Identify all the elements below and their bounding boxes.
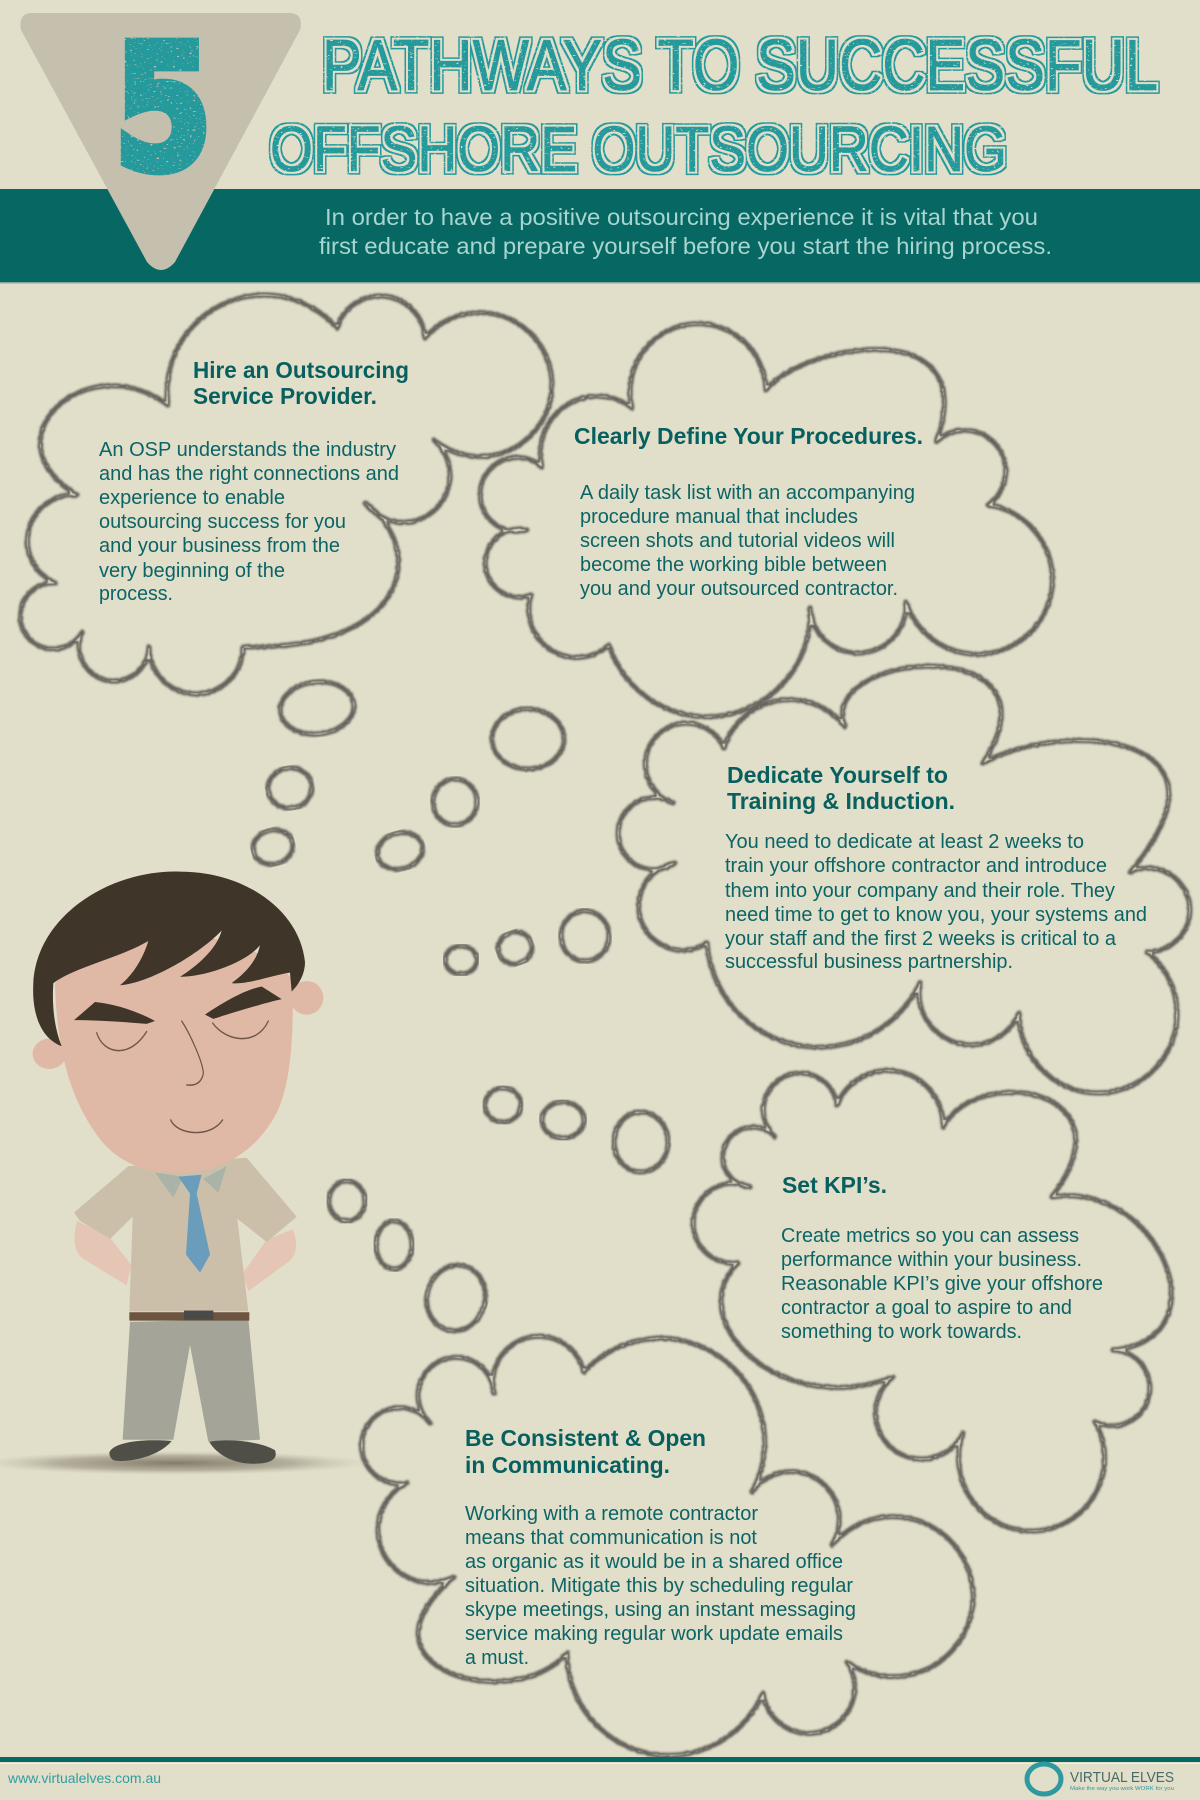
intro text: first educate and prepare yourself before you start the hiring process. [319,233,1052,259]
panel: be consistent and open in communicating [362,1336,973,1755]
panel: clearly define your procedures: become the working bible between [580,553,887,576]
panel: clearly define your procedures: screen shots and tutorial videos will [580,529,895,552]
panel: hire an outsourcing service provider: and your business from the [99,534,340,557]
panel: be consistent and open in communicating: in Communicating. [465,1452,670,1478]
thought bubbles to first cloud [249,678,357,869]
panel: clearly define your procedures: A daily task list with an accompanying [580,481,915,504]
panel: dedicate yourself to training and induction: need time to get to know you, your systems and [725,903,1147,926]
panel: set KPIs [693,1071,1171,1531]
panel: dedicate yourself to training and induction: Dedicate Yourself to [727,762,948,788]
panel: be consistent and open in communicating: Working with a remote contractor [465,1502,758,1525]
eyebrows [74,986,282,1024]
collar [155,1166,227,1198]
character: thinking man [33,871,323,1464]
panel: dedicate yourself to training and induction: successful business partnership. [725,950,1013,973]
panel: clearly define your procedures: Clearly Define Your Procedures. [574,423,923,449]
panel: hire an outsourcing service provider: An OSP understands the industry [99,438,397,461]
panel: hire an outsourcing service provider [20,295,552,694]
facial lines [97,1021,268,1133]
panel: dedicate yourself to training and induction: You need to dedicate at least 2 weeks to [725,830,1084,853]
panel: hire an outsourcing service provider: process. [99,582,173,605]
title: OFFSHORE OUTSOURCING [270,113,1007,185]
logo: virtual elves: Make the way you work WORK for you [1070,1786,1174,1792]
panel: hire an outsourcing service provider: very beginning of the [99,559,285,582]
panel: set KPIs: Set KPI’s. [782,1172,887,1198]
panel: hire an outsourcing service provider: Service Provider. [193,383,377,409]
panel: hire an outsourcing service provider: Hire an Outsourcing [193,357,409,383]
panel: clearly define your procedures: you and your outsourced contractor. [580,577,898,600]
arms [74,1221,296,1291]
inverted triangle badge [20,13,301,270]
panel: set KPIs: Reasonable KPI’s give your offshore [781,1272,1103,1295]
panel: hire an outsourcing service provider: experience to enable [99,486,285,509]
logo: virtual elves [1027,1764,1174,1794]
panel: dedicate yourself to training and induction [618,666,1190,1093]
logo: virtual elves: VIRTUAL ELVES [1070,1769,1174,1786]
thought bubbles to second cloud [373,709,564,874]
hair [33,871,305,1046]
panel: be consistent and open in communicating: a must. [465,1646,529,1669]
thought bubbles to fourth cloud [485,1088,668,1172]
thought bubbles to third cloud [445,911,609,974]
shoes [109,1440,276,1464]
panel: be consistent and open in communicating: service making regular work update emails [465,1622,843,1645]
panel: be consistent and open in communicating: means that communication is not [465,1526,757,1549]
panel: set KPIs: performance within your business. [781,1248,1082,1271]
panel: dedicate yourself to training and induction: them into your company and their role. They [725,879,1116,902]
panel: be consistent and open in communicating: situation. Mitigate this by scheduling regular [465,1574,853,1597]
intro text: In order to have a positive outsourcing experience it is vital that you [325,204,1038,230]
tie [178,1175,210,1273]
belt [129,1311,249,1321]
panel: be consistent and open in communicating: as organic as it would be in a shared office [465,1550,843,1573]
ears [33,981,323,1069]
panel: dedicate yourself to training and induction: Training & Induction. [727,788,955,814]
thought bubbles to fifth cloud [329,1181,493,1337]
footer bar [0,1757,1200,1764]
panel: clearly define your procedures: procedure manual that includes [580,505,858,528]
panel: dedicate yourself to training and induction: your staff and the first 2 weeks is critical to a [725,927,1117,950]
floor shadow [0,1451,370,1475]
panel: hire an outsourcing service provider: outsourcing success for you [99,510,346,533]
shirt [74,1158,297,1311]
panel: set KPIs: contractor a goal to aspire to and [781,1296,1072,1319]
panel: be consistent and open in communicating: skype meetings, using an instant messaging [465,1598,856,1621]
pants [123,1319,260,1442]
panel: hire an outsourcing service provider: and has the right connections and [99,462,399,485]
number 5: 5 [114,9,212,210]
panel: set KPIs: Create metrics so you can assess [781,1224,1079,1247]
panel: clearly define your procedures [480,324,1052,717]
panel: set KPIs: something to work towards. [781,1320,1022,1343]
footer url: www.virtualelves.com.au [7,1770,161,1786]
face [55,935,293,1173]
panel: be consistent and open in communicating: Be Consistent & Open [465,1425,706,1451]
title [270,26,1158,185]
intro text [319,204,1052,259]
panel: dedicate yourself to training and induction: train your offshore contractor and introduce [725,854,1107,877]
header band [0,189,1200,284]
